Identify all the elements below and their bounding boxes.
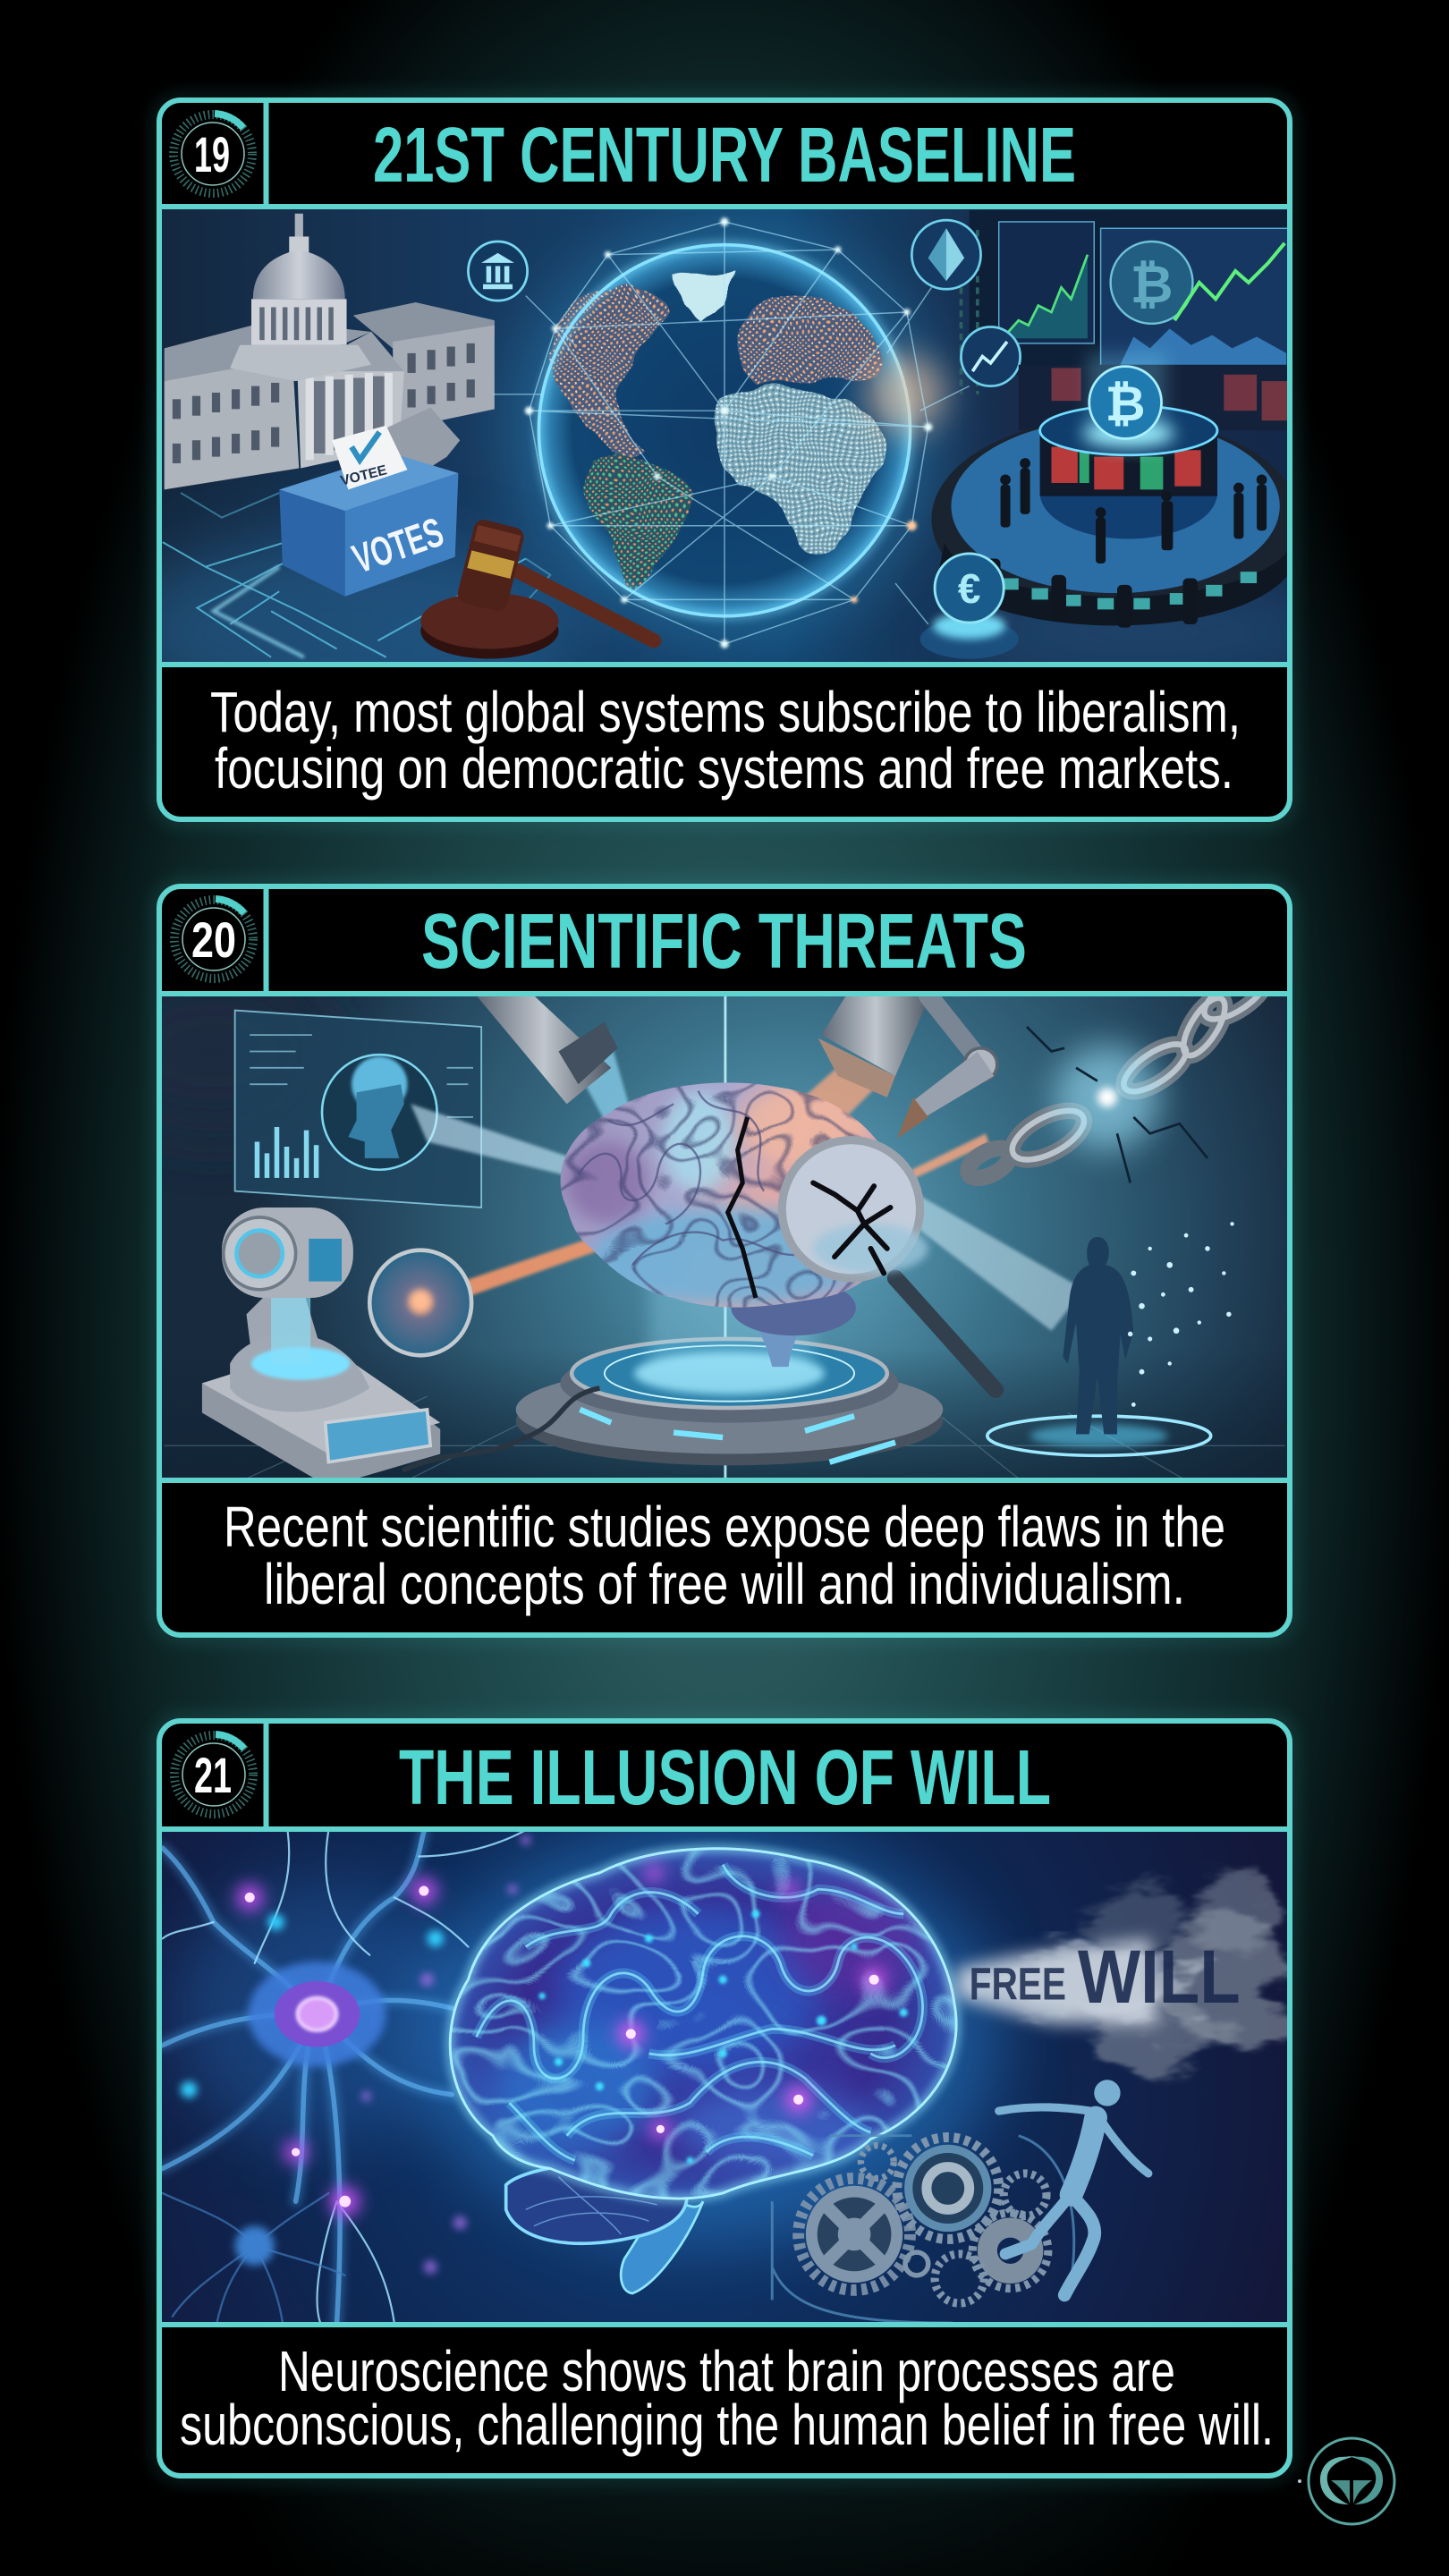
bottom vignette [0, 2236, 1449, 2576]
panel outline [159, 100, 1290, 819]
dissolving figure [987, 1237, 1211, 1455]
particles [1128, 1222, 1234, 1407]
vertical light line [724, 996, 726, 1479]
badge: 20 [174, 899, 253, 979]
holographic platform [402, 1265, 943, 1470]
capitol building [165, 214, 495, 489]
panel outline [159, 886, 1290, 1635]
gears [772, 2136, 1074, 2323]
header divider and rules [159, 103, 1290, 665]
header divider and rules [159, 889, 1290, 1480]
trading floor ring [931, 353, 1300, 628]
smoke trail [956, 1868, 1290, 2065]
floor circuit lines [163, 493, 550, 657]
badge: 21 [174, 1734, 253, 1814]
badge: 19: 19 [194, 126, 230, 182]
large neuron soma [248, 1962, 386, 2067]
chain breaking [963, 963, 1274, 1184]
glowing brain [436, 1840, 970, 2209]
network lines around globe [493, 222, 970, 644]
panel outline [159, 1721, 1290, 2476]
illustration: glowing brain, neurons, gears and fading free will [156, 1824, 1298, 2333]
scanner machine [202, 1208, 440, 1487]
panel: the illusion of will [156, 1721, 1298, 2476]
floor grid [165, 1396, 1284, 1479]
neuron sparks [181, 1835, 530, 2274]
lens disc with orange core [369, 1250, 471, 1355]
cerebellum [731, 1280, 856, 1335]
spark at chain break [1027, 1027, 1208, 1182]
FREE WILL fading text [970, 1935, 1241, 2019]
caption text [224, 1495, 1225, 1616]
panel: 21st century baseline [115, 100, 1347, 819]
icon: bank circle [468, 242, 528, 301]
data screen with head hologram [235, 1011, 481, 1208]
heading: 21st century baseline: 21ST CENTURY BASELINE [373, 112, 1076, 199]
network nodes [525, 217, 932, 648]
caption text [210, 680, 1241, 801]
caption text: Recent scientific studies expose deep flaws in the [224, 1495, 1225, 1559]
cracked brain [550, 1068, 920, 1323]
ballot box with VOTES label [279, 426, 458, 597]
panel: scientific threats [98, 886, 1298, 1635]
trading floor ring: ₿ [1106, 376, 1146, 431]
icon: ethereum circle [911, 220, 981, 289]
neuron network [163, 1830, 526, 2323]
header divider and rules [159, 1724, 1290, 2325]
illustration: brain under examination with chain and dissolving figure [98, 963, 1298, 1487]
brain stem and cerebellum [506, 2164, 703, 2293]
beams into brain [411, 1031, 1084, 1331]
illustration: capitol, ballot box, gavel, globe and markets [115, 206, 1347, 731]
icon: euro token on pedestal [920, 554, 1019, 659]
FREE WILL fading text: WILL [1078, 1935, 1241, 2019]
icon: chart circle [961, 327, 1021, 386]
microscope barrels [477, 996, 930, 1104]
badge: 21: 21 [194, 1747, 232, 1803]
badge: 19 [174, 114, 252, 193]
brain stem [731, 1294, 821, 1367]
caption text: liberal concepts of free will and individualism. [264, 1552, 1185, 1616]
globe with continents [538, 245, 945, 616]
running figure [999, 2080, 1148, 2295]
FREE WILL fading text: FREE [970, 1957, 1066, 2009]
gavel [420, 518, 654, 659]
brain sparks [538, 1865, 908, 2164]
ballot box with VOTES label: VOTES [347, 508, 449, 582]
caption text [180, 2339, 1274, 2457]
magnifying glass [782, 1140, 996, 1390]
caption text: Neuroscience shows that brain processes are [278, 2339, 1175, 2403]
small neuron soma [235, 2226, 275, 2266]
robotic needle arm [897, 996, 997, 1139]
badge: 20: 20 [191, 911, 236, 968]
market screens with charts [961, 210, 1298, 394]
heading: scientific threats: SCIENTIFIC THREATS [421, 898, 1027, 985]
market screens with charts: ₿ [1131, 256, 1173, 314]
logo emblem [1298, 2432, 1401, 2530]
heading: the illusion of will: THE ILLUSION OF WILL [399, 1734, 1051, 1821]
ballot box with VOTES label: VOTEE [339, 462, 388, 489]
icon: euro token on pedestal: € [958, 565, 980, 612]
